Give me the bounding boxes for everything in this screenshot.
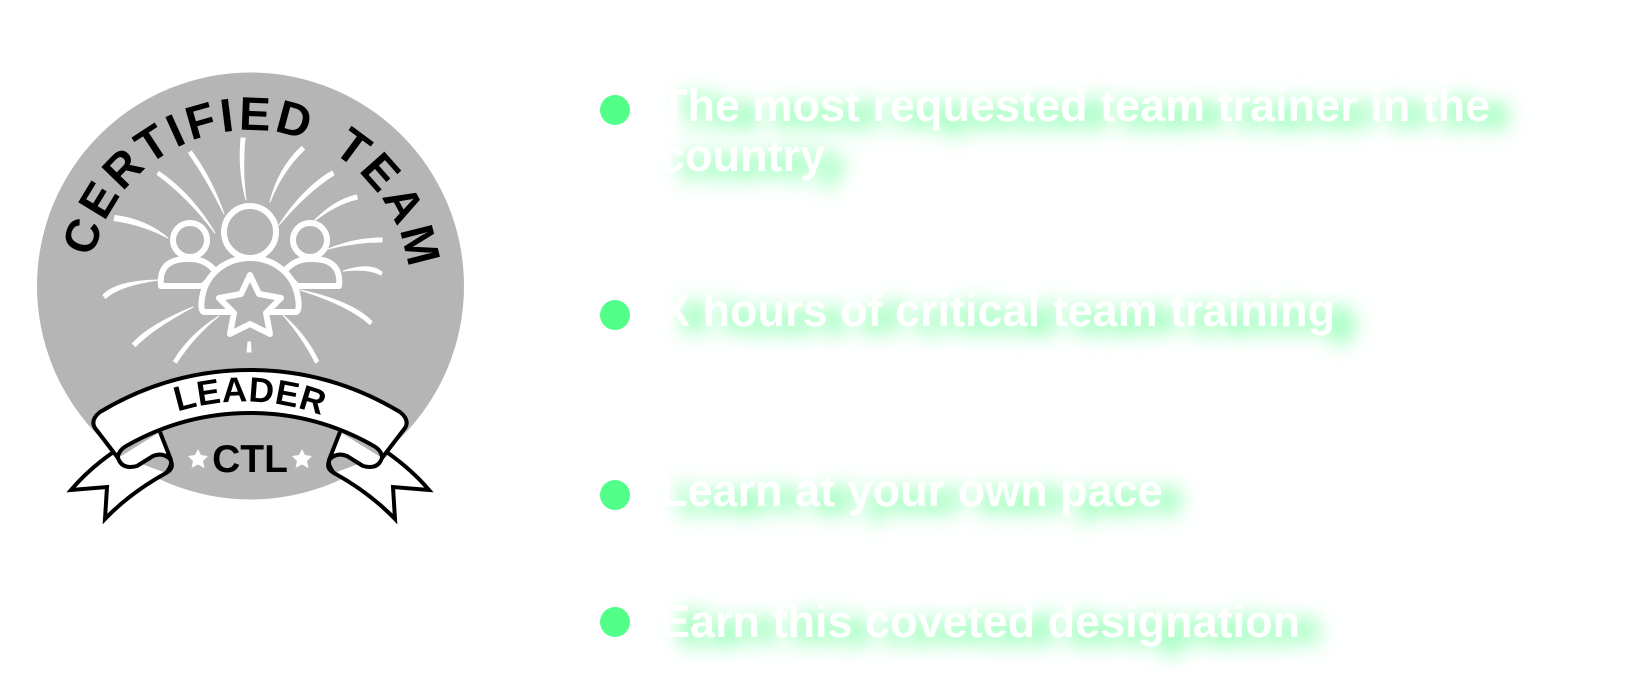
text block 4: Earn this coveted designation xyxy=(660,596,1300,647)
text block 2: X hours of critical team training xyxy=(660,285,1335,336)
icon: centre person xyxy=(201,206,299,312)
icon: left person xyxy=(161,223,216,286)
bullet dot 4 xyxy=(600,607,630,637)
bullet dot 3 xyxy=(600,480,630,510)
ribbon: right fold xyxy=(328,432,382,473)
text block 1: The most requested team trainer in the country xyxy=(660,80,1490,181)
ribbon banner xyxy=(66,368,434,524)
icon: team of three people with star xyxy=(161,206,339,334)
ribbon: main band xyxy=(93,370,407,458)
icon: right small star xyxy=(292,449,312,468)
curved heading: certified team: CERTIFIED TEAM xyxy=(66,97,440,265)
icon: right person xyxy=(284,223,339,286)
icon: radiating rays xyxy=(103,138,382,363)
bullet dot 1 xyxy=(600,95,630,125)
label: CTL: CTL xyxy=(212,438,288,481)
badge grey circle xyxy=(37,72,464,500)
ribbon: right tail xyxy=(334,453,429,519)
ribbon: left tail xyxy=(71,453,166,519)
badge: certified team leader xyxy=(37,72,464,524)
bullet dot 2 xyxy=(600,300,630,330)
icon: left small star xyxy=(188,449,208,468)
text block 3: Learn at your own pace xyxy=(660,465,1163,516)
ribbon: left fold xyxy=(118,432,172,473)
ribbon text: leader: LEADER xyxy=(174,377,325,415)
icon: star xyxy=(219,275,281,334)
